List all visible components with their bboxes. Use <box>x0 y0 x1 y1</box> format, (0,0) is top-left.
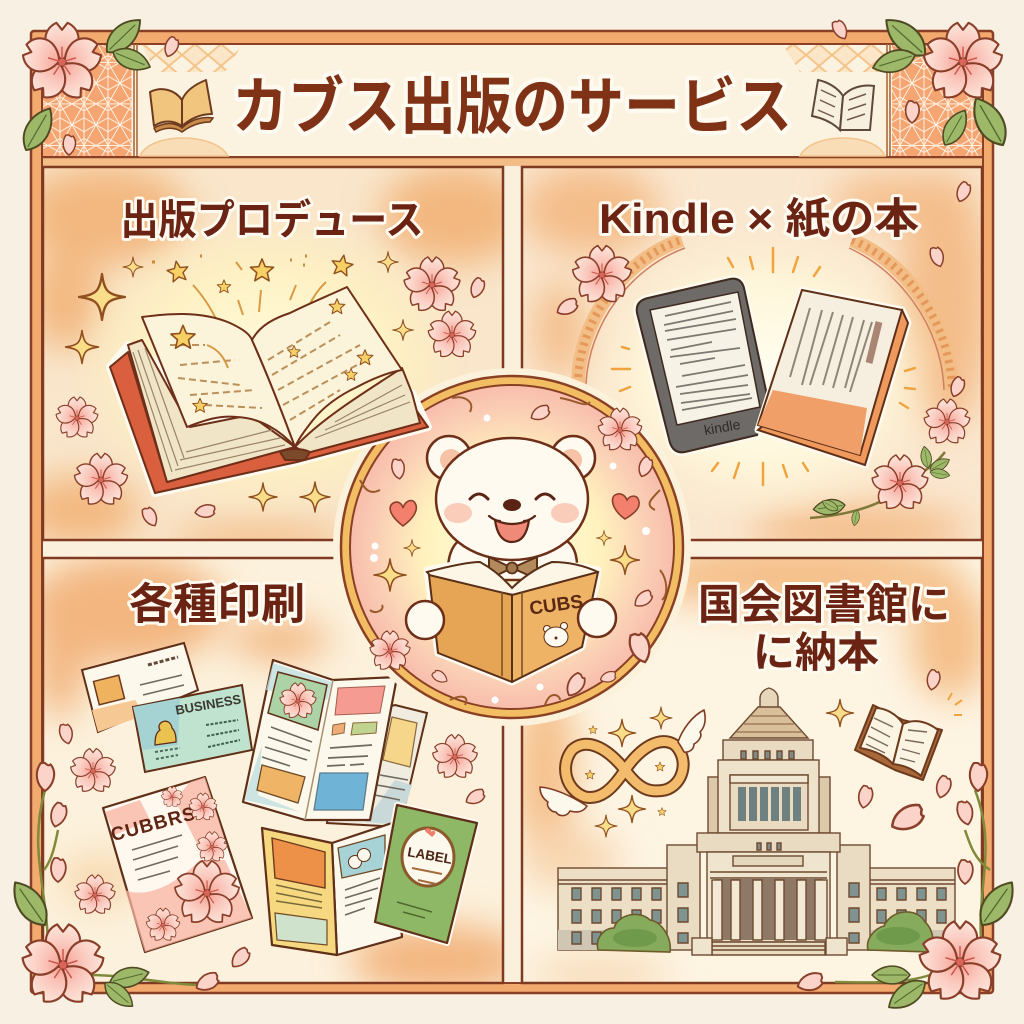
hearts <box>390 501 416 526</box>
illustration: open book with stars <box>110 287 428 493</box>
corner sakura bottom right <box>795 763 1022 1016</box>
icon: open book <box>855 693 962 780</box>
kindle brand: kindle <box>703 416 742 438</box>
medallion ring <box>333 368 691 726</box>
heading: 国会図書館に <box>698 581 950 628</box>
book held by bear <box>406 562 616 682</box>
sakura decoration <box>54 257 487 529</box>
illustration: label card <box>375 805 477 943</box>
petals <box>857 669 953 836</box>
icon: closed book left <box>150 80 213 132</box>
illustration: tri-fold brochure <box>243 660 427 827</box>
decorations <box>368 403 655 704</box>
panel: kindle and paper book <box>520 165 990 555</box>
label title: LABEL <box>406 844 453 867</box>
heading: Kindle × 紙の本 <box>599 195 919 242</box>
corner sakura top left <box>16 12 181 156</box>
sakura and branch <box>554 181 973 526</box>
heading <box>698 581 950 676</box>
illustration: national diet building <box>558 688 955 955</box>
illustration: business card green <box>133 685 252 772</box>
bow tie <box>489 557 537 579</box>
decorative arch <box>578 240 952 390</box>
illustration: sakura flyer <box>103 777 252 952</box>
mini bear <box>544 622 568 647</box>
illustration: kindle <box>637 279 768 452</box>
illustration: folded leaflet <box>262 823 402 955</box>
icon: infinity with wings <box>540 699 854 837</box>
heading: に納本 <box>753 629 879 676</box>
title banner <box>132 44 892 156</box>
illustration: paper book <box>758 290 908 465</box>
stars and sparkles <box>66 252 413 512</box>
bushes <box>597 912 933 952</box>
flyer title: CUBBRS <box>109 803 198 846</box>
central portico <box>692 852 847 955</box>
panel: publishing produce <box>42 166 504 542</box>
heading: 各種印刷 <box>129 581 305 629</box>
radiating light rays <box>612 248 915 485</box>
sakura decoration <box>58 723 487 971</box>
left wing <box>558 868 668 950</box>
panel: national diet library <box>515 540 990 995</box>
heading: カブス出版のサービス <box>232 73 792 142</box>
corner sakura bottom left <box>5 763 221 1013</box>
illustration: business card cream <box>82 643 198 732</box>
corner pattern: top left <box>43 45 132 156</box>
panel: printing <box>42 556 504 984</box>
corner sakura top right <box>830 11 1014 151</box>
wings <box>678 710 705 752</box>
bear <box>427 436 595 580</box>
icon: open book right <box>812 80 874 130</box>
corner pattern: top right <box>892 45 982 156</box>
book title: CUBS <box>528 591 584 620</box>
towers <box>667 845 870 950</box>
page stars <box>171 299 373 412</box>
right wing <box>868 868 955 950</box>
heading: 出版プロデュース <box>120 197 424 243</box>
center medallion with bear <box>333 368 691 726</box>
dome and upper tiers <box>697 688 840 852</box>
illustration: business card green: BUSINESS <box>174 691 243 718</box>
